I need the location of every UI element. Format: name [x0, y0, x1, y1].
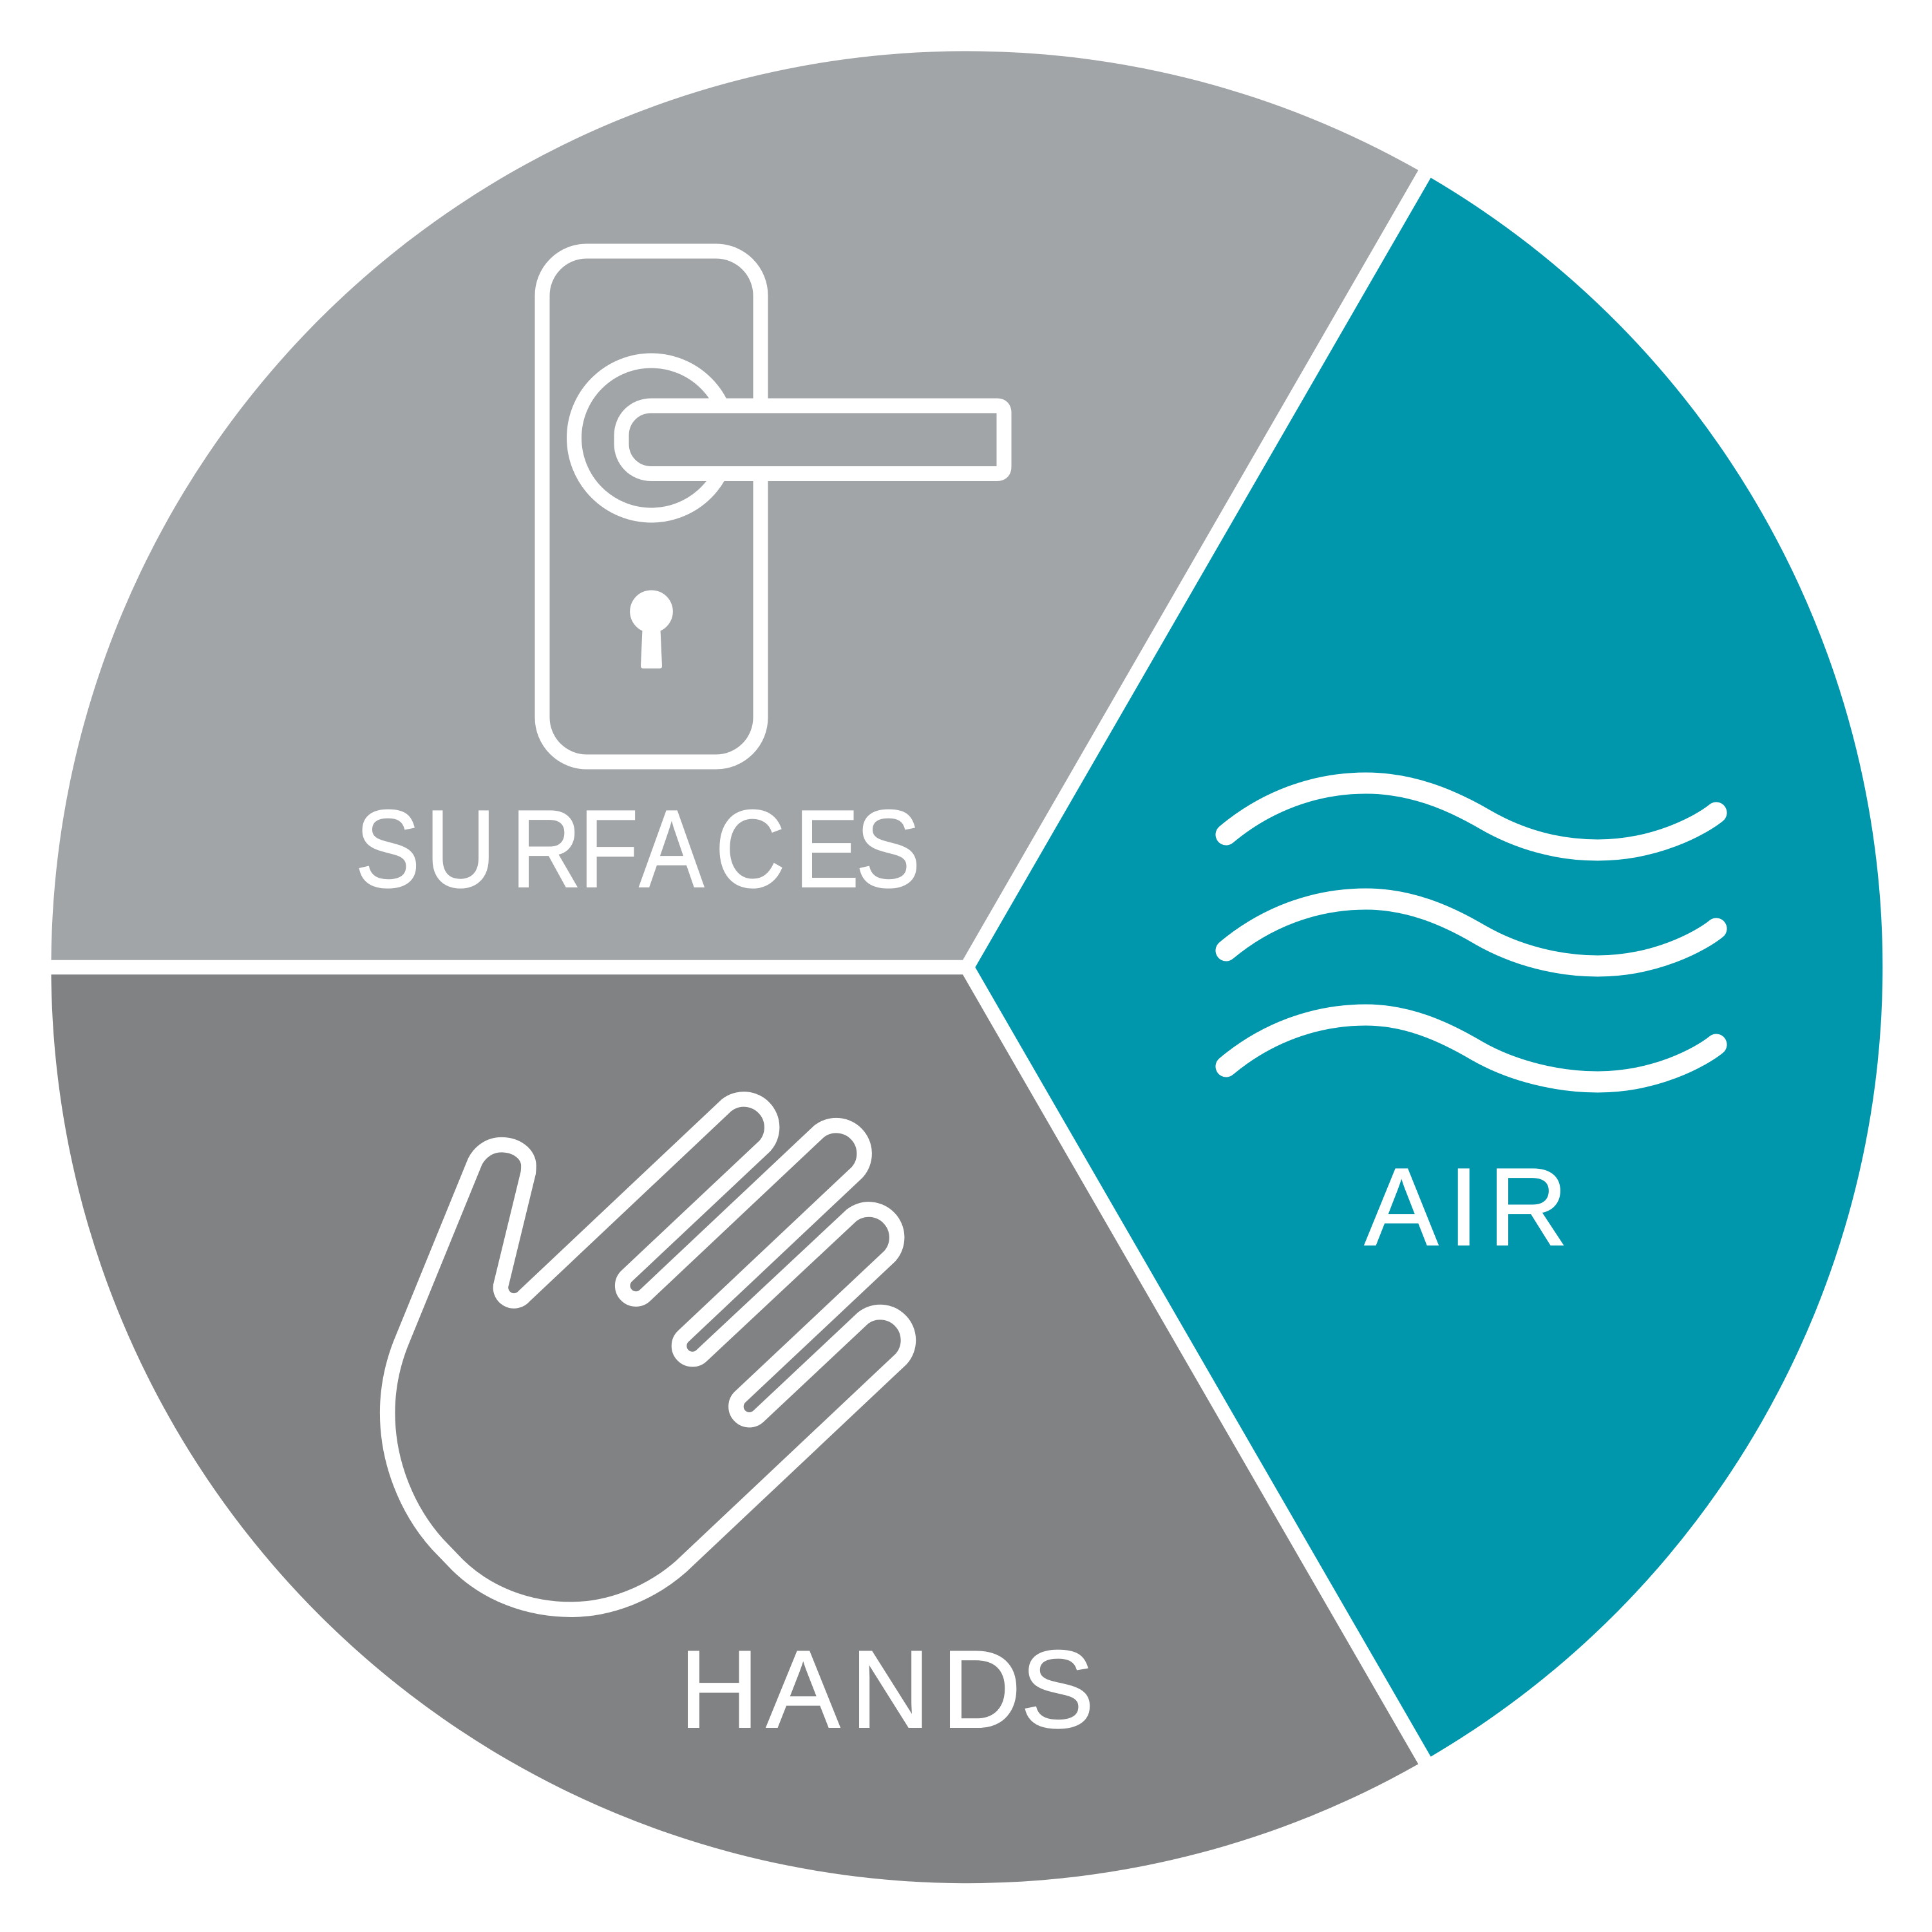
label: hands: HANDS	[679, 1628, 1094, 1751]
segment: surfaces wedge	[52, 51, 1418, 960]
wave 2	[1226, 899, 1716, 966]
handle rose	[574, 361, 729, 515]
icon: door handle	[542, 251, 1004, 762]
label: air: AIR	[1365, 1146, 1567, 1269]
panel: surfaces	[52, 51, 1418, 960]
wave 1	[1226, 783, 1716, 850]
keyhole	[630, 590, 673, 668]
icon: hand	[388, 1099, 908, 1609]
icon: air waves	[1226, 783, 1716, 1082]
segment: air wedge	[975, 178, 1882, 1757]
wave 3	[1226, 1015, 1716, 1082]
lever	[621, 406, 1004, 474]
segment: hands wedge	[52, 974, 1418, 1883]
panel: air	[975, 178, 1882, 1757]
door plate	[542, 251, 761, 762]
label: surfaces: SURFACES	[355, 788, 920, 911]
panel: hands	[52, 974, 1418, 1883]
